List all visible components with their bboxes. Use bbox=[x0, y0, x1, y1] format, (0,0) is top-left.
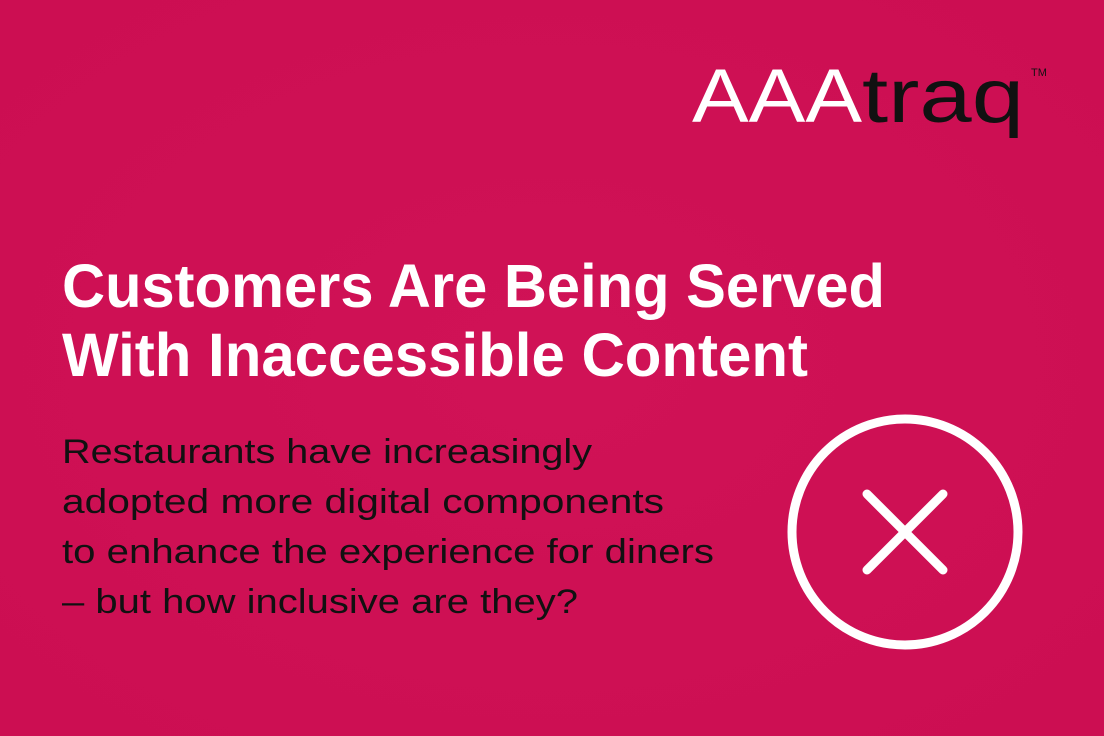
logo: AAAtraq bbox=[692, 54, 1047, 139]
logo: AAAtraq: traq bbox=[862, 54, 1024, 139]
body text: Restaurants have increasingly bbox=[62, 433, 592, 471]
logo: AAAtraq: AAA bbox=[692, 54, 862, 139]
title: With Inaccessible Content bbox=[62, 321, 808, 389]
body text: adopted more digital components bbox=[62, 483, 664, 521]
body text: – but how inclusive are they? bbox=[62, 583, 578, 621]
logo: AAAtraq: TM bbox=[1031, 67, 1047, 79]
title: Customers Are Being Served bbox=[62, 252, 885, 320]
body text: to enhance the experience for diners bbox=[62, 533, 714, 571]
icon: cross in circle bbox=[792, 419, 1018, 645]
title bbox=[62, 252, 885, 389]
body text bbox=[62, 433, 714, 621]
